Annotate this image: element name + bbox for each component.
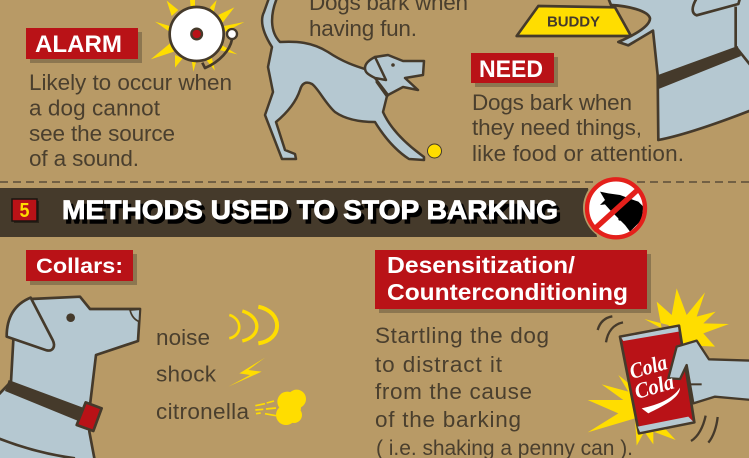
text: need description [472, 90, 684, 166]
label: Collars: Collars: [36, 255, 123, 278]
illustration: dog with BUDDY tag [517, 0, 749, 140]
icon: number 5: 5 [20, 200, 30, 222]
text: desensitization description [375, 323, 633, 458]
icon: alarm bell [151, 0, 244, 72]
text: alarm description [29, 70, 232, 171]
text: alarm description: see the source [29, 121, 175, 146]
illustration: dog with BUDDY tag: BUDDY [547, 14, 600, 31]
text: alarm description: Likely to occur when [29, 70, 232, 95]
illustration: dog with collar [0, 297, 140, 458]
text: desensitization description: from the cause [375, 379, 532, 404]
text and icon: noise [156, 307, 277, 350]
text: need description: Dogs bark when [472, 90, 632, 115]
text and icon: shock: shock [156, 362, 217, 386]
illustration: hand shaking cola can: Cola [631, 369, 677, 404]
label: ALARM: ALARM [35, 31, 122, 58]
text: fun description: having fun. [309, 16, 417, 41]
illustration: playing dog with ball [262, 0, 442, 160]
illustration: hand shaking cola can [588, 288, 749, 446]
text: desensitization description: Startling the dog [375, 323, 549, 348]
label: Desensitization / Counterconditioning [375, 250, 651, 313]
text: alarm description: of a sound. [29, 146, 139, 171]
icon: no barking sign [583, 175, 649, 241]
text: fun description [309, 0, 468, 41]
label: NEED: NEED [479, 56, 543, 83]
text and icon: shock [156, 358, 265, 387]
text: alarm description: a dog cannot [29, 96, 161, 120]
text and icon: citronella [156, 390, 306, 425]
label: Desensitization / Counterconditioning: Counterconditioning [387, 279, 628, 305]
text: need description: like food or attention. [472, 141, 684, 166]
label: Desensitization / Counterconditioning: Desensitization/ [387, 252, 576, 278]
heading band: 5 methods used to stop barking: METHODS USED TO STOP BARKING [62, 195, 558, 225]
text and icon: noise: noise [156, 325, 210, 350]
label: NEED [471, 53, 558, 87]
illustration: hand shaking cola can: Cola [626, 349, 670, 384]
text: desensitization description: of the barking [375, 407, 521, 432]
text: need description: they need things, [472, 115, 642, 140]
heading band: 5 methods used to stop barking [0, 188, 597, 237]
text and icon: citronella: citronella [156, 399, 249, 424]
text: desensitization description: to distract it [375, 352, 503, 377]
heading band: 5 methods used to stop barking: METHODS USED TO STOP BARKING [65, 199, 561, 229]
label: ALARM [26, 28, 142, 63]
icon: number 5 [12, 199, 39, 223]
label: Collars [26, 250, 137, 285]
